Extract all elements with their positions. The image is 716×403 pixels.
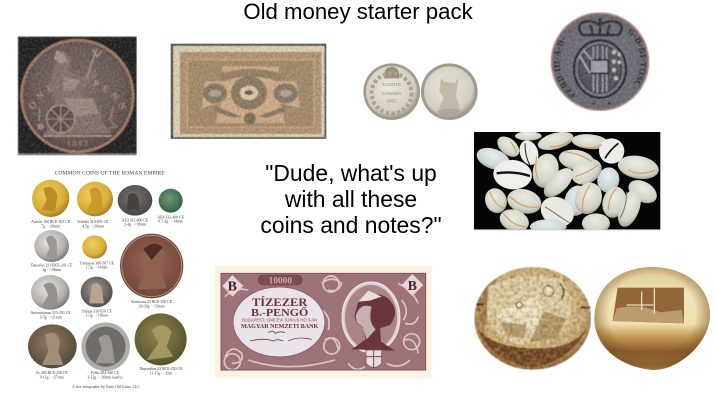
value oval: MAGYAR NEMZETI BANK [241,324,319,330]
coin captions: Tremissis 380-567 CE [79,261,114,265]
corner B left: B [228,280,237,295]
coin: tremissis [82,235,107,259]
coin captions: AE4 333-400 CE [157,215,185,219]
image: electrum coin, lion side [474,267,591,370]
corner B left [222,275,243,297]
coat of arms [366,350,382,367]
coin: aureus [32,180,69,217]
image: ornate banknote [171,44,326,139]
coin: as [28,324,77,368]
coin: dupondius [135,313,187,365]
value oval: TÍZEZER [252,295,308,309]
coin captions: 0.5-3g · ~14mm [158,220,183,224]
image: Roman coins chart [28,171,187,390]
note medallions [202,66,300,125]
coin date: 1883 [67,138,89,148]
quote text: with all these [284,186,417,212]
image: electrum coin, punch side [594,267,710,370]
coin captions: Antoninianus 215-291 CE [31,311,71,315]
coin captions: 3g · ~18mm [42,268,61,272]
coin captions: 20-30g · ~33mm [139,304,165,308]
coin captions: As 280 BCE-250 CE [36,371,68,375]
coin captions: Denarius 211 BCE-241 CE [31,264,73,268]
bottom dots [593,102,610,104]
corner B right [402,274,423,296]
coin captions: Siliqua 310-650 CE [81,309,113,313]
coin captions [31,215,185,379]
coin: siliqua [81,277,113,307]
coin captions: AE3 311-400 CE [122,218,149,222]
legend right: G·D·DI·TOSC· [628,28,647,89]
coin captions: 7g · ~20mm [41,224,60,228]
image: two Canadian silver coins [363,63,478,120]
coin captions: Aureus 100 BCE-301 CE [31,220,71,224]
image: one penny coin [17,36,137,156]
coin captions: 3-12g · ~26mm (early) [87,375,123,379]
coin captions: Dupondius 23 BCE-250 CE [140,367,183,371]
shield [574,40,626,98]
chart heading: COMMON COINS OF THE ROMAN EMPIRE [55,171,165,177]
crown [579,18,622,35]
value oval: BUDAPEST, 1946 ÉVI JÚNIUS HÓ 3-ÁN [242,317,317,322]
denomination pill [258,275,303,286]
image: cowrie shells [474,129,661,236]
coin: reverse with crown [363,63,420,120]
value oval: B.-PENGŐ [251,307,308,319]
coin captions: 3-5g · ~21mm [40,315,62,319]
coin: solidus [77,182,113,216]
portrait oval [342,282,400,352]
note scrollwork [224,276,420,370]
coin captions: Sestertius 23 BCE-250 CE [131,300,173,304]
coin: reverse with crown: 1937 [386,98,397,103]
legend left: FERD·III·A·D· [554,38,576,99]
coin captions: 1.5g · ~14mm [86,266,108,270]
coin: reverse with crown: CANADA [382,91,402,96]
chart footer: A free infographic by Fairy Old Coins, LLC [72,385,140,390]
quote text: "Dude, what's up [265,160,437,186]
coin captions: 11-15g · ~29m [150,371,172,375]
coin captions: 9-11g · ~27mm [40,375,64,379]
coin: follis [81,322,130,371]
coin inscription: O N E [28,84,54,109]
denomination pill: 10000 [269,276,292,286]
quote text: coins and notes?" [260,212,442,238]
coin: AE4 [159,189,183,213]
coin: AE3 [118,185,152,216]
corner B right: B [408,279,417,294]
incuse square punch [613,288,684,323]
coin: sestertius [120,234,183,298]
coin captions: 4.5g · ~20mm [82,224,104,228]
image: 10000 pengő banknote [215,266,432,378]
quote text [260,160,442,238]
coin: reverse with crown: 5 CENTS [383,82,401,87]
coin captions: 2-4g · ~18mm [124,223,146,227]
coin: denarius [34,230,69,262]
coin captions: 1-3g · ~18mm [86,314,108,318]
coin figure: Britannia [37,48,117,136]
coin captions: Solidus 310-691 CE [77,220,109,224]
coin: antoninianus [31,275,70,310]
value oval [233,287,325,357]
coin: obverse with king [421,63,478,120]
image: Tuscan coin [550,12,650,111]
coin captions: Follis 294-340 CE [91,371,120,375]
